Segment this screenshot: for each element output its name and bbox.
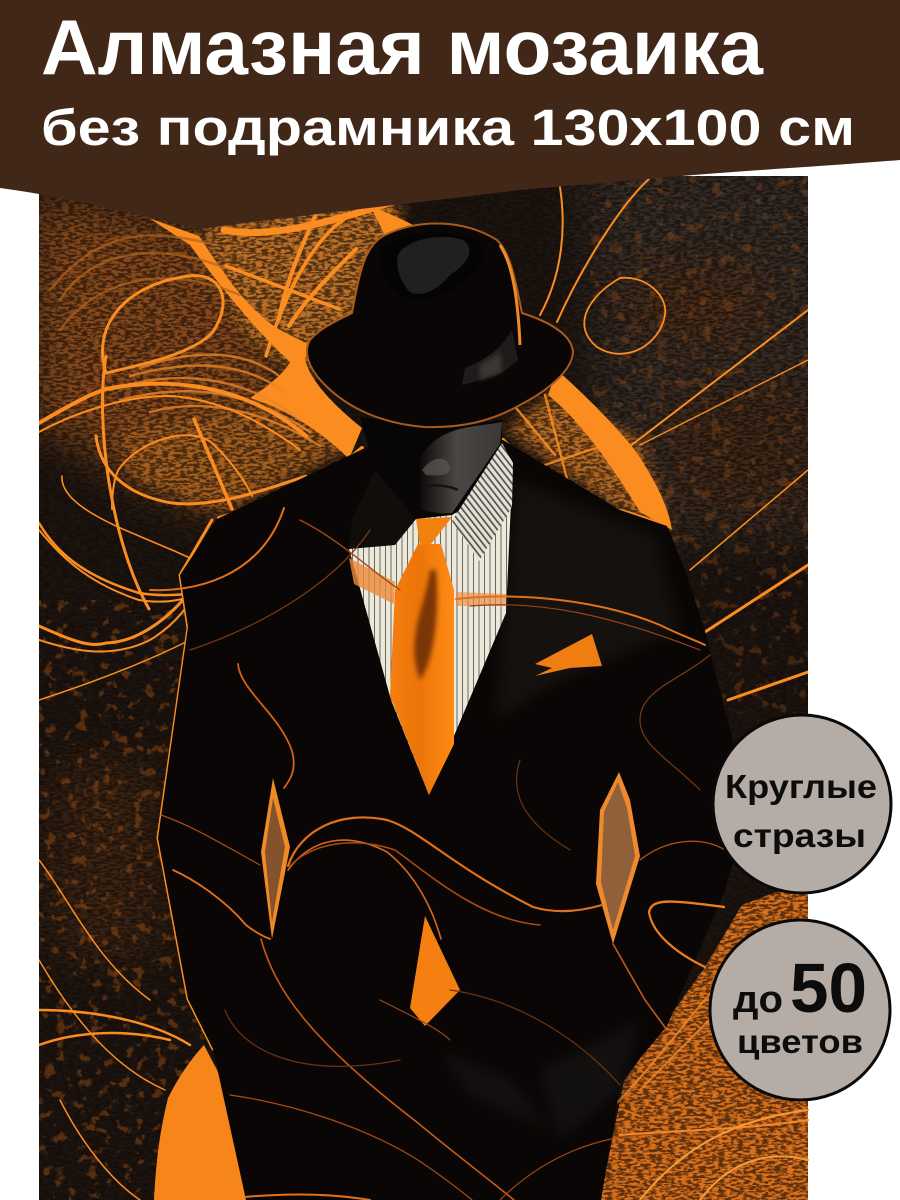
tie [390, 517, 454, 795]
thick band right of hat [548, 370, 672, 530]
fibres fanning out from wedge [110, 355, 320, 446]
hat crown top [397, 237, 469, 294]
poster background [30, 150, 840, 1200]
orange smear on shirt [349, 558, 395, 604]
badge: up to 50 colours: до [733, 979, 783, 1021]
face [360, 417, 502, 513]
left sleeve slit [261, 778, 290, 939]
shirt collar [452, 443, 513, 561]
pocket square [535, 634, 602, 676]
shirt [349, 480, 512, 795]
background swirl lines [39, 176, 808, 1200]
band under hat to shoulder [219, 448, 362, 518]
left collar shadow [349, 470, 416, 549]
badge: up to 50 colours: 50 [790, 949, 867, 1027]
badge: round rhinestones [713, 715, 891, 893]
header banner [0, 0, 900, 229]
mouth [421, 485, 458, 490]
tie knot [416, 517, 452, 546]
texture: lower right orange [600, 880, 808, 1200]
tie fold [414, 570, 437, 680]
nose shadow [422, 458, 450, 475]
man's suit jacket [158, 440, 745, 1200]
right sleeve slit [596, 772, 640, 944]
badge: up to 50 colours: цветов [737, 1023, 863, 1060]
hat [307, 224, 573, 427]
suit lapel shading [440, 480, 680, 1140]
title: Алмазная мозаика [41, 3, 764, 91]
hat crown dent [380, 232, 485, 299]
hat band highlight [462, 330, 518, 385]
orange line on shirt [456, 592, 506, 606]
badge: up to 50 colours [710, 920, 890, 1100]
badge: round rhinestones: Круглые [725, 768, 877, 805]
hat band shine [480, 352, 502, 380]
texture: dark fine grain [39, 176, 808, 1200]
hat silhouette [307, 224, 573, 427]
big orange wedge left of hat [149, 218, 362, 459]
badge: round rhinestones: стразы [733, 817, 866, 854]
swirl lines over the suit [150, 508, 808, 1200]
texture: orange speckle left [39, 600, 219, 1200]
orange blob lower left [154, 1045, 246, 1200]
hat right edge glow [500, 245, 520, 345]
subtitle: без подрамника 130х100 см [41, 99, 855, 156]
texture: orange speckle right [590, 176, 808, 716]
lower tie [410, 916, 460, 1026]
